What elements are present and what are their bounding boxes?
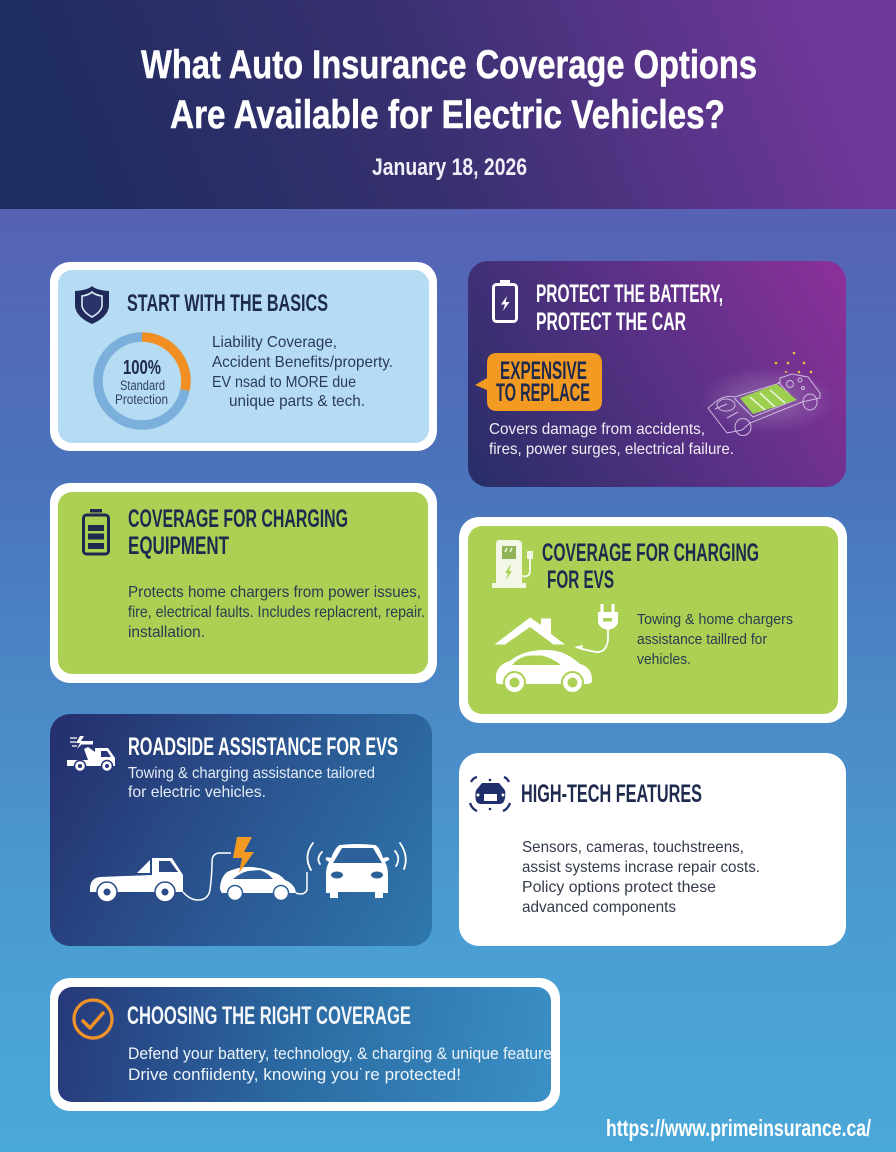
- heading: CHOOSING THE RIGHT COVERAGE: [127, 1002, 411, 1030]
- icon: car with sensors: [470, 777, 510, 811]
- body text: for electric vehicles.: [128, 784, 266, 801]
- body text: assist systems incrase repair costs.: [522, 859, 760, 876]
- heading: COVERAGE FOR CHARGING: [542, 539, 759, 567]
- icon: battery outline: [494, 280, 516, 322]
- body text: fires, power surges, electrical failure.: [489, 441, 734, 458]
- body text: assistance taillred for: [637, 631, 767, 648]
- body text: Accident Benefits/property.: [212, 354, 393, 371]
- heading: FOR EVS: [547, 566, 614, 594]
- panel: high-tech features: [459, 753, 846, 946]
- chart: coverage ring: 100%: [123, 357, 161, 379]
- body text: EV nsad to MORE due: [212, 374, 356, 391]
- body text: [128, 584, 425, 641]
- body text: Drive confiidenty, knowing you˙re protected!: [128, 1065, 461, 1084]
- chart: coverage ring: Protection: [115, 392, 168, 407]
- illustration: EV chassis with battery: [700, 352, 836, 436]
- body text: vehicles.: [637, 651, 691, 668]
- body text: [212, 334, 393, 410]
- icon: small tow truck: [67, 736, 115, 772]
- heading: START WITH THE BASICS: [127, 290, 328, 317]
- body text: [637, 611, 793, 668]
- body text: [522, 839, 760, 916]
- body text: [128, 765, 375, 801]
- icon: shield: [75, 286, 109, 324]
- heading: [542, 539, 759, 594]
- body text: advanced components: [522, 899, 676, 916]
- body text: [489, 421, 734, 458]
- heading: PROTECT THE CAR: [536, 308, 686, 336]
- body text: Sensors, cameras, touchstreens,: [522, 839, 744, 856]
- callout: expensive to replace: [475, 353, 602, 411]
- body text: installation.: [128, 624, 205, 641]
- body text: Protects home chargers from power issues,: [128, 584, 421, 601]
- icon: full battery: [84, 509, 108, 554]
- illustration: tow truck, charging car, connected car: [90, 837, 406, 902]
- callout: expensive to replace: TO REPLACE: [496, 379, 590, 407]
- illustration: home, car and plug: [494, 604, 618, 693]
- heading: HIGH-TECH FEATURES: [521, 780, 702, 808]
- body text: fire, electrical faults. Includes replacrent, repair.: [128, 604, 425, 621]
- body text: Towing & home chargers: [637, 611, 793, 628]
- body text: Liability Coverage,: [212, 334, 337, 351]
- chart: coverage ring: Standard: [120, 378, 165, 393]
- heading: PROTECT THE BATTERY,: [536, 280, 723, 308]
- chart: coverage ring: [98, 337, 186, 425]
- panel: coverage for charging for EVs: [459, 517, 847, 723]
- panel: choosing the right coverage: [50, 978, 560, 1111]
- body text: Policy options protect these: [522, 879, 716, 896]
- body text: [128, 1045, 552, 1084]
- heading: EQUIPMENT: [128, 532, 229, 560]
- panel: roadside assistance: [50, 714, 432, 946]
- body text: Towing & charging assistance tailored: [128, 765, 375, 782]
- heading: COVERAGE FOR CHARGING: [128, 505, 348, 533]
- heading: ROADSIDE ASSISTANCE FOR EVS: [128, 733, 398, 761]
- icon: check circle: [74, 1000, 112, 1038]
- header banner: [0, 0, 896, 209]
- title: Are Available for Electric Vehicles?: [170, 93, 725, 137]
- heading: [128, 505, 348, 560]
- body text: Covers damage from accidents,: [489, 421, 705, 438]
- body text: Defend your battery, technology, & charging & unique feature: [128, 1045, 552, 1063]
- panel: protect the battery: [468, 261, 846, 487]
- body text: unique parts & tech.: [229, 393, 365, 410]
- icon: lightning bolt: [233, 837, 254, 873]
- title: What Auto Insurance Coverage Options: [141, 43, 757, 87]
- panel: start with the basics: [50, 262, 437, 451]
- panel: coverage for charging equipment: [50, 483, 437, 683]
- title: [141, 43, 757, 137]
- icon: charging pump: [492, 540, 533, 588]
- heading: [536, 280, 723, 336]
- callout: expensive to replace: EXPENSIVE: [500, 357, 587, 385]
- date: January 18, 2026: [372, 154, 527, 181]
